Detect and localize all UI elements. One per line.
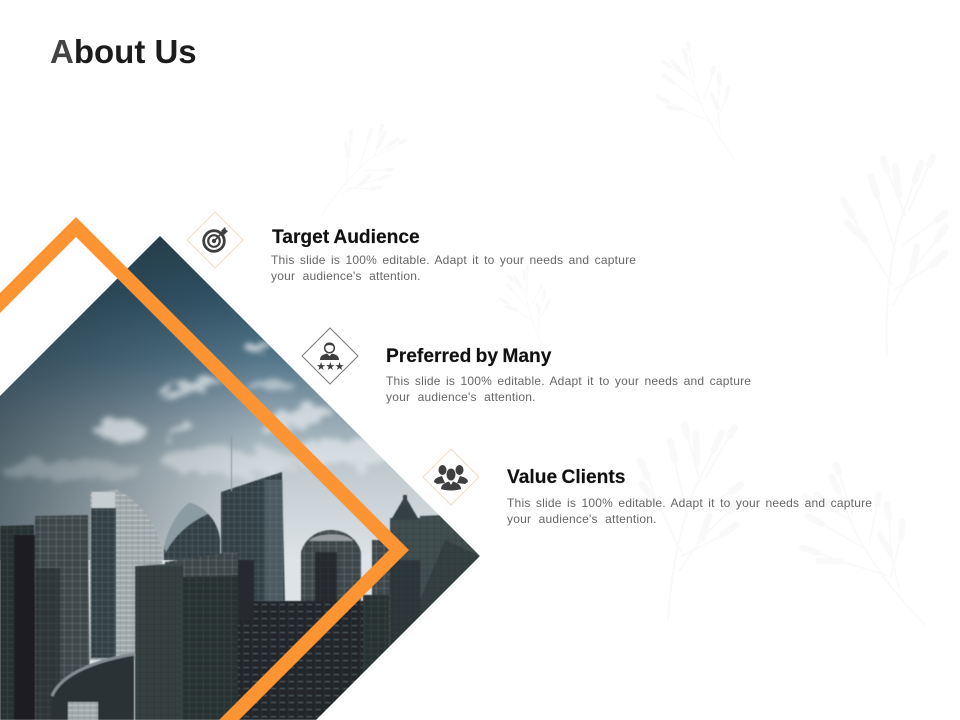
item: Target Audience [187,212,636,283]
bottom left curved roof [52,654,134,720]
body text: This slide is 100% editable. Adapt it to your needs and capture [271,253,636,267]
body text line 2: your audience's attention. [507,512,657,526]
body text line 2: your audience's attention. [386,390,536,404]
arched tower [164,503,220,560]
heading: Value Clients [507,467,625,488]
sky [0,230,490,720]
mid tower front [164,552,238,578]
icon: group of people in diamond [423,449,479,505]
light curved tower [90,490,162,660]
body text: This slide is 100% editable. Adapt it to your needs and capture [386,374,751,388]
item: Value Clients [423,449,872,526]
glass skyscraper [221,472,285,605]
title: About Us [50,33,197,70]
icon: target in diamond [187,212,243,268]
domed tower [301,530,361,610]
heading: Target Audience [272,227,420,248]
clouds [0,342,390,479]
background: faint plant watermarks [302,39,960,651]
icon: person with stars in diamond [302,328,358,384]
icon: person with stars in diamond: ★★★ [316,360,345,373]
right towers [372,540,390,650]
orange chevron frame [0,217,409,720]
body text line 2: your audience's attention. [271,269,421,283]
item: Preferred by Many [302,328,751,404]
left towers [0,525,36,720]
body text: This slide is 100% editable. Adapt it to your needs and capture [507,496,872,510]
low dark block [238,601,363,720]
photo: city skyline in diamond [0,230,490,720]
buildings [0,435,480,720]
heading: Preferred by Many [386,346,552,367]
